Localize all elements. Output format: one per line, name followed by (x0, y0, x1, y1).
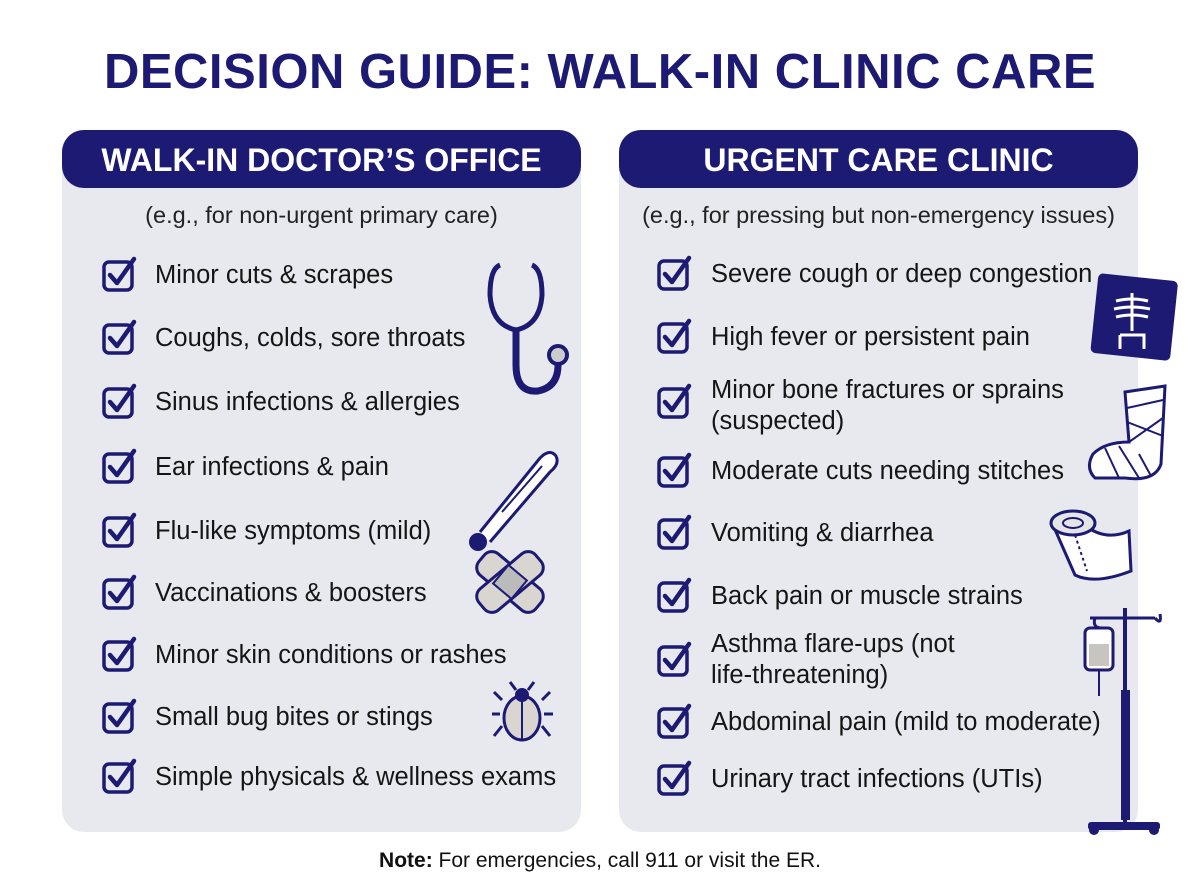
list: walk-in items (155, 261, 556, 791)
item: Flu-like symptoms (mild) (155, 517, 431, 545)
subtitle: (e.g., for non-urgent primary care) (145, 202, 498, 228)
item: Sinus infections & allergies (155, 388, 460, 416)
item: Minor skin conditions or rashes (155, 641, 506, 669)
icon: x-ray (1090, 274, 1178, 360)
title: DECISION GUIDE: WALK-IN CLINIC CARE (104, 45, 1096, 99)
icon: cast (1088, 384, 1167, 480)
icon: bandages (475, 550, 545, 614)
icon: thermometer (469, 451, 559, 551)
item: High fever or persistent pain (711, 323, 1030, 351)
header: walk-in doctor's office (62, 130, 581, 188)
item: Moderate cuts needing stitches (711, 457, 1064, 485)
icon: gauze roll (1050, 510, 1133, 581)
item: (suspected) (711, 407, 844, 435)
panel: urgent care clinic (619, 130, 1138, 832)
note: Note: For emergencies, call 911 or visit the ER. (379, 849, 821, 872)
item: Coughs, colds, sore throats (155, 324, 465, 352)
item: Asthma flare-ups (not (711, 630, 955, 658)
header: urgent care clinic: URGENT CARE CLINIC (703, 142, 1054, 178)
subtitle: (e.g., for pressing but non-emergency issues) (642, 202, 1115, 228)
item: Vaccinations & boosters (155, 579, 427, 607)
item: Urinary tract infections (UTIs) (711, 765, 1043, 793)
item: Minor bone fractures or sprains (711, 376, 1064, 404)
item: Vomiting & diarrhea (711, 519, 934, 547)
item (711, 376, 1064, 435)
panel: walk-in doctor's office (62, 130, 581, 832)
list: urgent care items (711, 260, 1101, 793)
item: Abdominal pain (mild to moderate) (711, 708, 1101, 736)
header: walk-in doctor's office: WALK-IN DOCTOR’S OFFICE (101, 142, 542, 178)
header: urgent care clinic (619, 130, 1138, 188)
icon: IV stand (1084, 608, 1162, 835)
item: Ear infections & pain (155, 453, 389, 481)
icon: stethoscope (488, 262, 569, 395)
item (711, 630, 955, 689)
item: Severe cough or deep congestion (711, 260, 1092, 288)
item: Small bug bites or stings (155, 703, 433, 731)
icon: bug (492, 681, 553, 742)
item: Back pain or muscle strains (711, 582, 1023, 610)
item: Simple physicals & wellness exams (155, 763, 556, 791)
item: life-threatening) (711, 661, 888, 689)
item: Minor cuts & scrapes (155, 261, 393, 289)
